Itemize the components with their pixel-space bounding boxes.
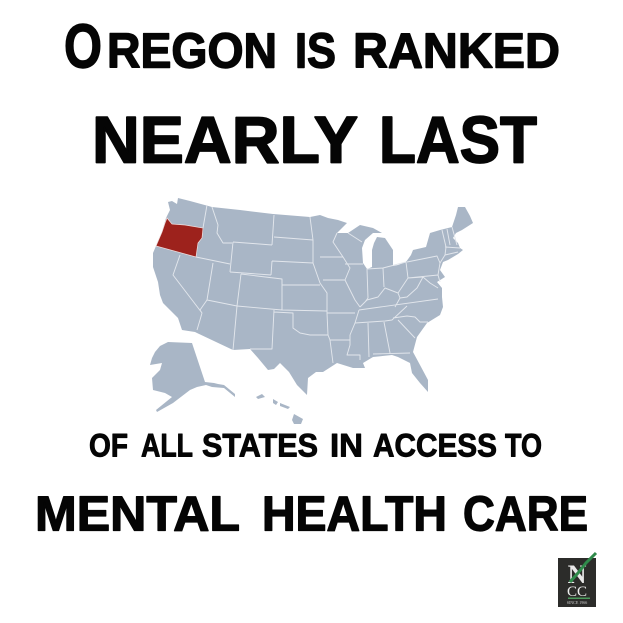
logo: NCC since 1966: CC [567,584,587,600]
logo: NCC since 1966 [558,553,596,607]
subheading: of all states in access to: ALL [141,428,193,464]
logo: NCC since 1966: SINCE 1966 [567,600,587,605]
title: Oregon is ranked: REGON [107,24,277,78]
heading: mental health care: HEALTH [262,488,447,542]
heading: mental health care: CARE [463,488,588,542]
subheading: of all states in access to: STATES [202,428,318,464]
subheading: of all states in access to: ACCESS [373,428,497,464]
subheading: of all states in access to [89,428,542,464]
subheading: of all states in access to: IN [330,428,363,464]
title: Oregon is ranked: IS [295,24,336,78]
contiguous states silhouette [153,198,473,395]
title: Oregon is ranked: O [64,12,102,82]
state highlight: Oregon [156,218,203,257]
map of the United States [150,198,473,424]
heading: nearly last: NEARLY [92,102,358,176]
white state borders [173,205,460,363]
subheading: of all states in access to: OF [89,428,128,464]
title: Oregon is ranked: RANKED [353,24,560,78]
title: Oregon is ranked [64,12,560,82]
heading: mental health care [35,488,588,542]
heading: nearly last [92,102,537,176]
Alaska [150,342,235,412]
subheading: of all states in access to: TO [505,428,542,464]
logo: NCC since 1966: N [568,560,587,589]
heading: mental health care: MENTAL [35,488,240,542]
heading: nearly last: LAST [379,102,537,176]
Hawaii [256,394,303,424]
